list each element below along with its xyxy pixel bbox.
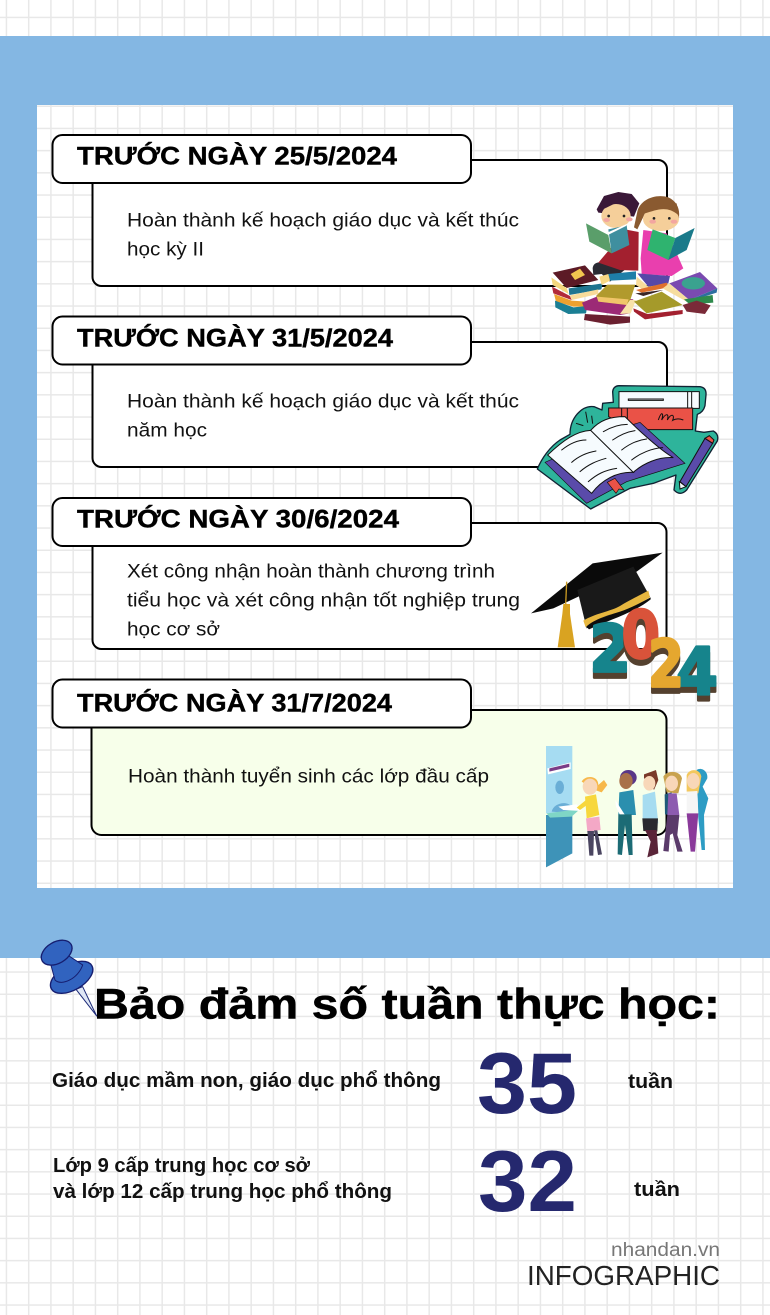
panel body 4 [92, 710, 666, 835]
icon: year 2024: 2 [589, 611, 631, 687]
row: 32 weeks: tuần [634, 1179, 680, 1201]
panel body 1: học kỳ II [127, 238, 204, 260]
row: 35 weeks: tuần [628, 1071, 673, 1093]
panel body 3: học cơ sở [127, 618, 220, 640]
row: 32 weeks [53, 1134, 680, 1230]
panel: before 30/6/2024 [52, 498, 666, 649]
icon: year 2024: 4 [676, 634, 718, 710]
panel body 3 [92, 523, 666, 649]
row: 32 weeks: 32 [478, 1134, 577, 1230]
icon: children reading on books [551, 192, 717, 325]
source credit [527, 1240, 720, 1291]
panel body 1: Hoàn thành kế hoạch giáo dục và kết thúc [127, 210, 519, 232]
panel body 1 [92, 160, 667, 286]
girl in purple [663, 772, 683, 852]
source credit: nhandan.vn [611, 1240, 720, 1261]
panel body 3: tiểu học và xét công nhận tốt nghiệp trung [127, 590, 520, 612]
heading 2: TRƯỚC NGÀY 31/5/2024 [77, 322, 393, 352]
icon: open book and pencil sticker [537, 386, 718, 509]
panel body 2: Hoàn thành kế hoạch giáo dục và kết thúc [127, 390, 519, 412]
heading 4: TRƯỚC NGÀY 31/7/2024 [77, 688, 392, 718]
panel body 2: năm học [127, 420, 207, 442]
icon: enrollment queue [546, 746, 708, 867]
panel: before 31/5/2024 [52, 316, 667, 467]
panel: before 31/7/2024 [52, 680, 666, 835]
heading 4 [52, 680, 471, 728]
row: 35 weeks: 35 [477, 1036, 577, 1132]
panel body 2 [92, 342, 667, 467]
heading 3 [52, 498, 471, 546]
panel: before 25/5/2024 [52, 135, 667, 286]
icon: year 2024 [589, 597, 718, 716]
row: 32 weeks: Lớp 9 cấp trung học cơ sở [53, 1155, 311, 1177]
heading 3: TRƯỚC NGÀY 30/6/2024 [77, 504, 399, 534]
icon: push pin [37, 935, 98, 1016]
boy in blue shirt [642, 770, 658, 857]
panel body 4: Hoàn thành tuyển sinh các lớp đầu cấp [128, 766, 489, 788]
row: 32 weeks: và lớp 12 cấp trung học phổ thông [53, 1181, 392, 1203]
girl in white top with shadow figure [687, 769, 708, 852]
heading 1 [52, 135, 471, 183]
blue frame [0, 36, 770, 958]
icon: graduation cap [531, 553, 663, 647]
title: guaranteed weeks: Bảo đảm số tuần thực học: [94, 980, 720, 1028]
icon: year 2024: 2 [648, 633, 684, 709]
row: 35 weeks: Giáo dục mầm non, giáo dục phổ thông [52, 1070, 441, 1092]
icon: year 2024: 2 [648, 627, 684, 703]
row: 35 weeks [52, 1036, 673, 1132]
icon: year 2024: 0 [622, 603, 660, 679]
panel body 3: Xét công nhận hoàn thành chương trình [127, 560, 495, 582]
icon: year 2024: 0 [622, 597, 660, 673]
icon: year 2024: 4 [676, 640, 718, 716]
source credit: INFOGRAPHIC [527, 1260, 720, 1291]
girl at counter [577, 777, 607, 856]
heading 1: TRƯỚC NGÀY 25/5/2024 [77, 140, 397, 170]
heading 2 [52, 316, 471, 364]
boy in teal vest [615, 770, 637, 855]
icon: year 2024: 2 [589, 617, 631, 693]
